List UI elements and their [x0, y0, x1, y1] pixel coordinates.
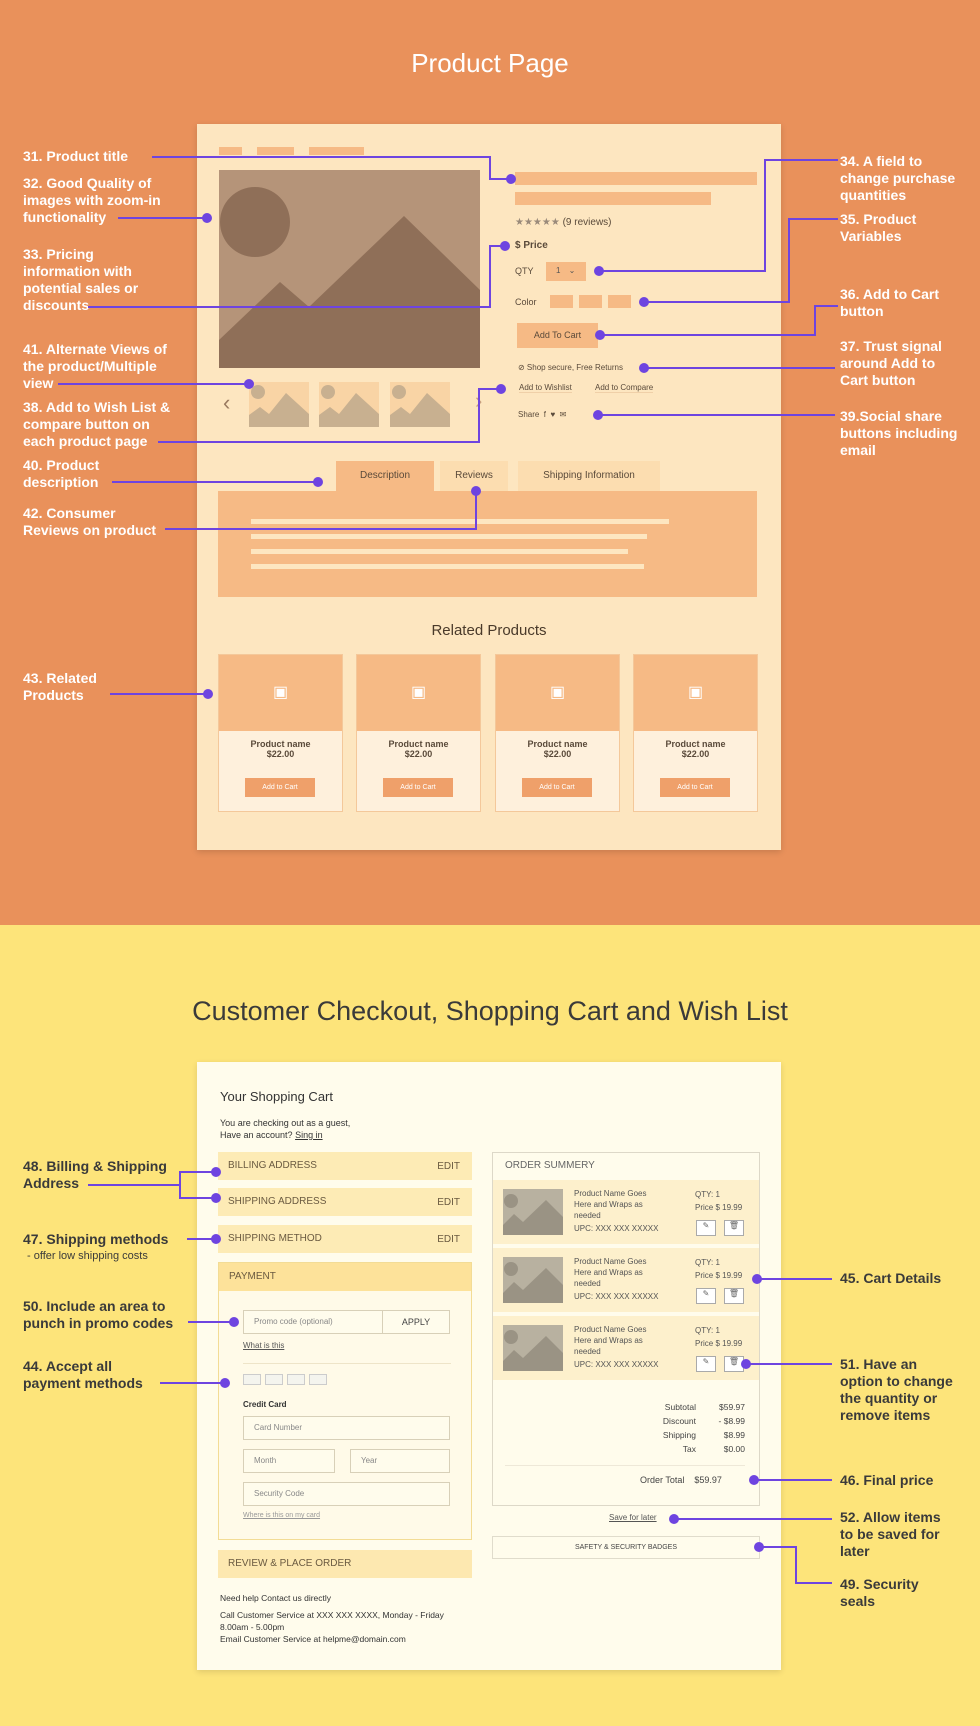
related product cards: ▣	[550, 684, 565, 701]
cart item 3: QTY: 1	[695, 1326, 720, 1335]
payment panel: Security Code	[254, 1489, 304, 1498]
label 33: discounts	[23, 297, 89, 313]
payment panel: APPLY	[402, 1317, 430, 1327]
label 33: information with	[23, 263, 132, 279]
label 50	[23, 1298, 173, 1331]
shipping method row: EDIT	[437, 1234, 460, 1245]
cart item 2: UPC: XXX XXX XXXXX	[574, 1292, 658, 1301]
related product cards: Product name	[665, 739, 726, 749]
cart item 2	[493, 1248, 759, 1312]
cart item 2: Price $ 19.99	[695, 1271, 742, 1280]
label 41: 41. Alternate Views of	[23, 341, 167, 357]
label 48	[23, 1158, 167, 1191]
background: orange top	[0, 0, 980, 925]
totals: Tax	[683, 1444, 696, 1454]
totals: $8.99	[724, 1430, 745, 1440]
label 49	[840, 1576, 919, 1609]
label 38	[23, 399, 170, 449]
cart item 3: UPC: XXX XXX XXXXX	[574, 1360, 658, 1369]
label 38: compare button on	[23, 416, 150, 432]
label 36: button	[840, 303, 884, 319]
review & place order	[218, 1550, 472, 1578]
label 49: 49. Security	[840, 1576, 919, 1592]
related product cards: Add to Cart	[400, 784, 436, 791]
label 52: 52. Allow items	[840, 1509, 941, 1525]
payment panel: Promo code (optional)	[254, 1317, 333, 1326]
label 40	[23, 457, 100, 490]
related product cards: Add to Cart	[539, 784, 575, 791]
label 43: 43. Related	[23, 670, 97, 686]
totals: Shipping	[663, 1430, 696, 1440]
label 48: 48. Billing & Shipping	[23, 1158, 167, 1174]
payment panel: Card Number	[254, 1423, 302, 1432]
label 39: email	[840, 442, 876, 458]
related product cards: Product name	[388, 739, 448, 749]
label 38: 38. Add to Wish List &	[23, 399, 170, 415]
security badges box	[492, 1536, 760, 1559]
cart item 3: needed	[574, 1347, 601, 1356]
related product cards	[218, 654, 758, 812]
payment panel: Credit Card	[243, 1400, 287, 1409]
label 33: potential sales or	[23, 280, 138, 296]
label 42	[23, 505, 156, 538]
label 32: images with zoom-in	[23, 192, 161, 208]
cart item 3: ✎	[703, 1357, 709, 1366]
label 43	[23, 670, 97, 703]
billing address row: EDIT	[437, 1161, 460, 1172]
label 47: - offer low shipping costs	[27, 1250, 148, 1262]
label 51: option to change	[840, 1373, 953, 1389]
cart item 1: UPC: XXX XXX XXXXX	[574, 1224, 658, 1233]
totals: $59.97	[719, 1402, 745, 1412]
panel: product page mockup	[197, 124, 781, 850]
breadcrumb	[219, 147, 364, 155]
guest text: Have an account? Sing in	[220, 1130, 323, 1140]
wishlist/compare: Add to Wishlist	[519, 383, 572, 392]
tabs	[336, 461, 660, 491]
title: Product Page: Product Page	[411, 48, 569, 78]
label 48: Address	[23, 1175, 79, 1191]
cart item 2: needed	[574, 1279, 601, 1288]
label 43: Products	[23, 687, 84, 703]
cart item 1: QTY: 1	[695, 1190, 720, 1199]
product title bars	[515, 172, 757, 185]
cart item 2: Here and Wraps as	[574, 1268, 643, 1277]
label 51: 51. Have an	[840, 1356, 917, 1372]
label 50: punch in promo codes	[23, 1315, 173, 1331]
payment panel: What is this	[243, 1341, 284, 1350]
related product cards: Product name	[250, 739, 310, 749]
cart item 2: ✎	[703, 1289, 709, 1298]
main product image	[219, 170, 480, 368]
label 34	[840, 153, 955, 203]
label 32: 32. Good Quality of	[23, 175, 151, 191]
title: checkout: Customer Checkout, Shopping Cart and Wish List	[192, 996, 788, 1026]
label 39: 39.Social share	[840, 408, 942, 424]
label 52	[840, 1509, 941, 1559]
label 41: view	[23, 375, 53, 391]
related product cards: ▣	[688, 684, 703, 701]
tabs: Reviews	[455, 470, 493, 481]
cart item 1: 🗑	[729, 1221, 739, 1230]
label 36: 36. Add to Cart	[840, 286, 939, 302]
label 35: Variables	[840, 228, 902, 244]
text: ORDER SUMMERY	[505, 1160, 595, 1171]
related product cards: $22.00	[405, 749, 432, 759]
totals: Subtotal	[665, 1402, 696, 1412]
label 45: 45. Cart Details	[840, 1270, 941, 1286]
label 44	[23, 1358, 143, 1391]
help text: Call Customer Service at XXX XXX XXXX, Monday - Friday	[220, 1610, 444, 1620]
payment panel: PAYMENT	[229, 1271, 276, 1282]
label 33	[23, 246, 138, 313]
cart item 3: Here and Wraps as	[574, 1336, 643, 1345]
label 49: seals	[840, 1593, 875, 1609]
related product cards: Add to Cart	[262, 784, 298, 791]
label 51	[840, 1356, 953, 1423]
tabs: Shipping Information	[543, 470, 635, 481]
label 47: 47. Shipping methods	[23, 1231, 168, 1247]
security badges box: SAFETY & SECURITY BADGES	[575, 1544, 677, 1551]
related product cards: $22.00	[682, 749, 709, 759]
related product cards: Product name	[527, 739, 588, 749]
label 34: 34. A field to	[840, 153, 922, 169]
label 32	[23, 175, 161, 225]
related product cards: $22.00	[544, 749, 571, 759]
tabs: Description	[360, 470, 410, 481]
label 44: 44. Accept all	[23, 1358, 112, 1374]
billing address row: BILLING ADDRESS	[228, 1160, 317, 1171]
cart item 3: Price $ 19.99	[695, 1339, 742, 1348]
payment panel: Year	[361, 1456, 377, 1465]
totals: - $8.99	[719, 1416, 745, 1426]
totals: $0.00	[724, 1444, 745, 1454]
label 37: Cart button	[840, 372, 915, 388]
related product cards: Add to Cart	[677, 784, 713, 791]
panel: product page mockup: 1 ⌄	[556, 266, 575, 275]
description box	[218, 491, 757, 597]
cart item 2: Product Name Goes	[574, 1257, 646, 1266]
totals	[663, 1402, 745, 1454]
cart item 2: 🗑	[729, 1289, 739, 1298]
billing address row	[218, 1152, 472, 1180]
label 33: 33. Pricing	[23, 246, 94, 262]
related product cards: ▣	[411, 684, 426, 701]
help text: Email Customer Service at helpme@domain.com	[220, 1634, 406, 1644]
label 41: the product/Multiple	[23, 358, 157, 374]
guest text	[220, 1118, 350, 1140]
related product cards: $22.00	[267, 749, 294, 759]
cart item 1: Price $ 19.99	[695, 1203, 742, 1212]
help text	[220, 1593, 444, 1644]
payment panel	[218, 1262, 472, 1540]
payment panel: Where is this on my card	[243, 1512, 320, 1519]
cart item 2: QTY: 1	[695, 1258, 720, 1267]
panel: product page mockup: Add to Compare	[595, 383, 653, 392]
label 35	[840, 211, 916, 244]
cart item 3: Product Name Goes	[574, 1325, 646, 1334]
label 50: 50. Include an area to	[23, 1298, 165, 1314]
related product cards: ▣	[273, 684, 288, 701]
label 42: Reviews on product	[23, 522, 156, 538]
shipping method row: SHIPPING METHOD	[228, 1233, 322, 1244]
cart heading: Your Shopping Cart	[220, 1089, 333, 1104]
label 37: around Add to	[840, 355, 935, 371]
share: Share f ♥ ✉	[518, 410, 566, 419]
help text: Need help Contact us directly	[220, 1593, 331, 1603]
label 39: buttons including	[840, 425, 957, 441]
label 37: 37. Trust signal	[840, 338, 942, 354]
rating: ★★★★★ (9 reviews)	[515, 217, 612, 228]
label 34: quantities	[840, 187, 906, 203]
label 40: 40. Product	[23, 457, 99, 473]
price: $ Price	[515, 240, 548, 251]
label 47	[23, 1231, 168, 1262]
label 46: 46. Final price	[840, 1472, 933, 1488]
cart item 1: Product Name Goes	[574, 1189, 646, 1198]
help text: 8.00am - 5.00pm	[220, 1622, 284, 1632]
left labels top: 31. Product title	[23, 148, 128, 164]
label 39	[840, 408, 957, 458]
label 40: description	[23, 474, 98, 490]
label 37	[840, 338, 942, 388]
cart item 1: needed	[574, 1211, 601, 1220]
trust signal: ⊘ Shop secure, Free Returns	[518, 363, 623, 372]
payment panel: Month	[254, 1456, 276, 1465]
panel: product page mockup: ›	[475, 388, 482, 413]
shipping address row	[218, 1188, 472, 1216]
qty: QTY	[515, 266, 534, 276]
order summary panel	[492, 1152, 760, 1506]
label 38: each product page	[23, 433, 147, 449]
thumbnails	[223, 382, 450, 427]
label 36	[840, 286, 939, 319]
label 35: 35. Product	[840, 211, 916, 227]
label 34: change purchase	[840, 170, 955, 186]
order total: Order Total $59.97	[640, 1475, 722, 1485]
label 32: functionality	[23, 209, 106, 225]
shipping address row: SHIPPING ADDRESS	[228, 1196, 326, 1207]
review & place order: REVIEW & PLACE ORDER	[228, 1558, 351, 1569]
related products heading: Related Products	[431, 622, 547, 639]
label 51: the quantity or	[840, 1390, 937, 1406]
cart item 1	[493, 1180, 759, 1244]
shipping method row	[218, 1225, 472, 1253]
save for later: Save for later	[609, 1513, 657, 1522]
cart item 3	[493, 1316, 759, 1380]
label 52: later	[840, 1543, 870, 1559]
cart item 1: ✎	[703, 1221, 709, 1230]
totals: Discount	[663, 1416, 696, 1426]
panel: cart mockup	[197, 1062, 781, 1670]
add to cart button: Add To Cart	[534, 330, 581, 340]
guest text: You are checking out as a guest,	[220, 1118, 350, 1128]
cart item 3: 🗑	[729, 1357, 739, 1366]
background: yellow bottom	[0, 925, 980, 1726]
label 44: payment methods	[23, 1375, 143, 1391]
add to cart button	[517, 323, 598, 348]
label 42: 42. Consumer	[23, 505, 116, 521]
label 41	[23, 341, 167, 391]
shipping address row: EDIT	[437, 1197, 460, 1208]
color swatches: Color	[515, 297, 537, 307]
thumbnails: ‹	[223, 390, 230, 415]
cart item 1: Here and Wraps as	[574, 1200, 643, 1209]
label 52: to be saved for	[840, 1526, 940, 1542]
label 51: remove items	[840, 1407, 930, 1423]
